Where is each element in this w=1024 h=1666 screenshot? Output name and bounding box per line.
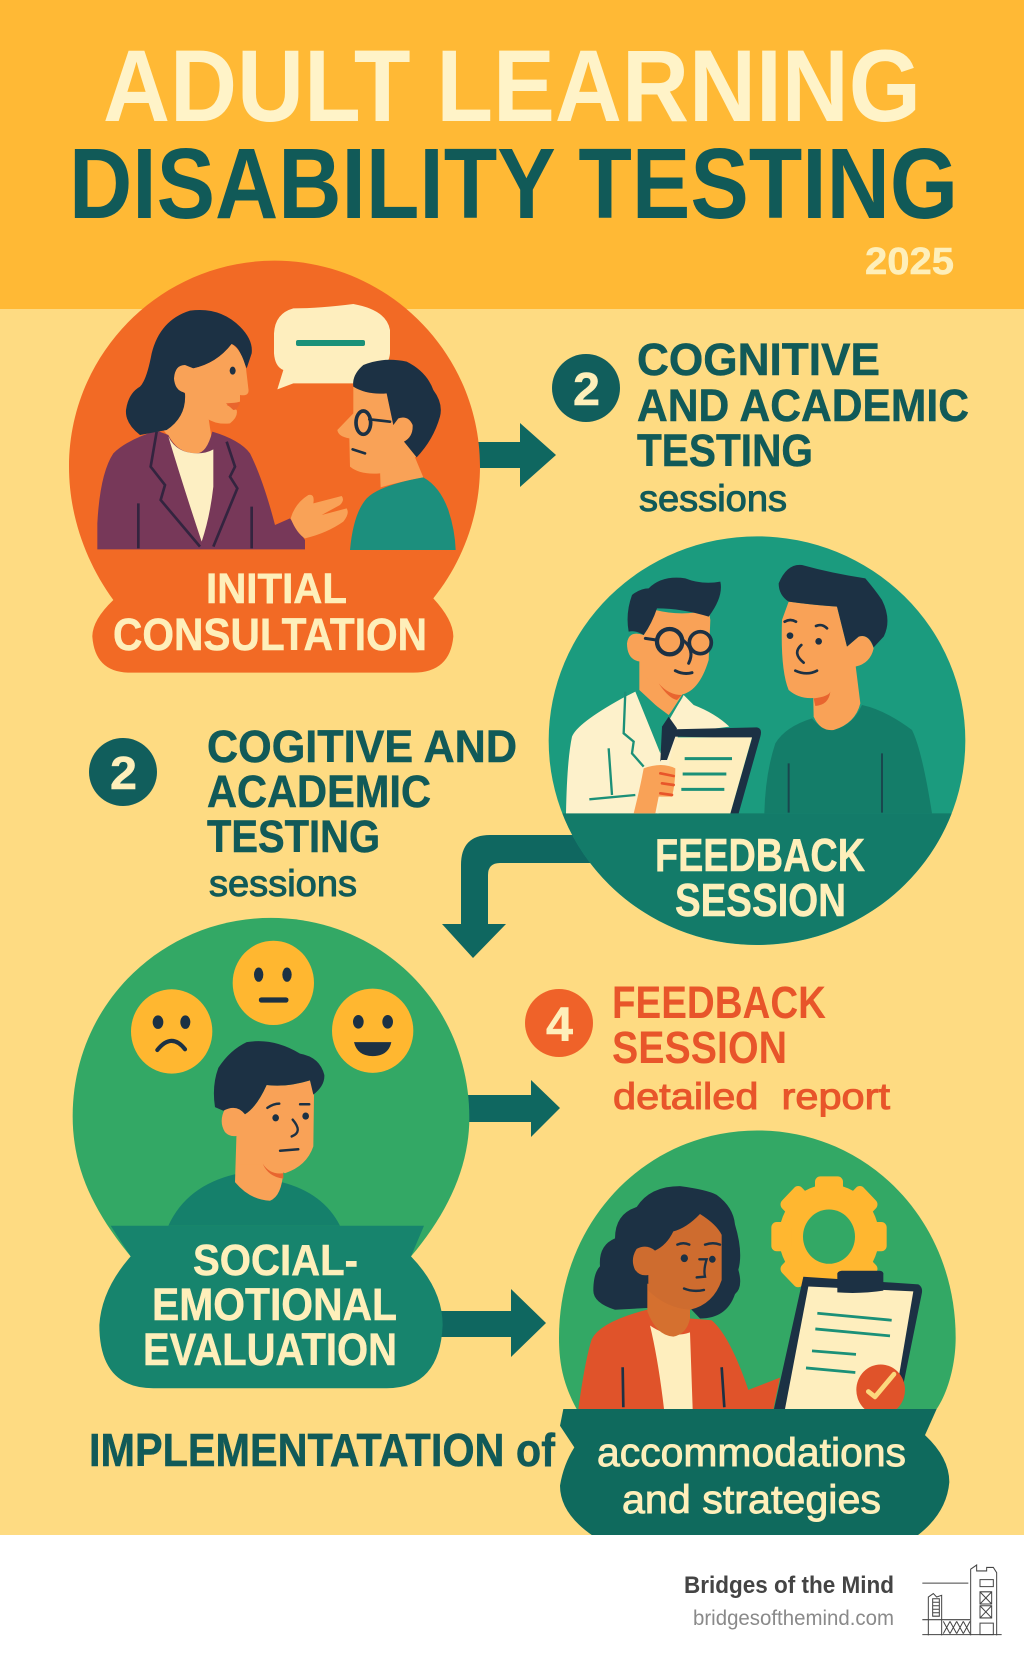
- website: bridgesofthemind.com: [693, 1607, 894, 1630]
- label: initial consultation: INITIAL: [206, 565, 347, 613]
- step 4 text: feedback session: FEEDBACK: [612, 977, 826, 1028]
- happy face: [332, 989, 413, 1073]
- step 4 text: feedback session: [525, 977, 891, 1117]
- woman: [578, 1186, 780, 1409]
- label band: [560, 1409, 949, 1536]
- clipboard with check: [774, 1271, 922, 1415]
- panel: social-emotional evaluation: [73, 918, 469, 1388]
- gear icon: [771, 1176, 887, 1297]
- step 2 text: cognitive and academic testing: [552, 334, 969, 519]
- worried person: [168, 1041, 340, 1226]
- number badge: [525, 989, 593, 1057]
- neutral face: [233, 941, 314, 1025]
- orange badge: [69, 261, 480, 673]
- number badge: [552, 354, 620, 422]
- label: feedback session: SESSION: [675, 874, 846, 926]
- patient: [764, 565, 932, 813]
- step 2 text: cognitive and academic testing: AND ACADEMIC: [637, 380, 969, 431]
- step 2 text: cognitive and academic testing: sessions: [639, 478, 787, 519]
- brand name: Bridges of the Mind: [684, 1572, 894, 1599]
- panel: feedback session: [549, 536, 965, 945]
- arrow: step 1 to step 2: [478, 423, 556, 487]
- speech bubble: [274, 304, 390, 389]
- implementation caption: IMPLEMENTATATION of: [89, 1424, 556, 1476]
- header banner: [0, 0, 1024, 309]
- green bulb: [73, 918, 469, 1256]
- step 2 text left: cogitive and academic testing: sessions: [209, 863, 357, 904]
- teal circle: [549, 536, 965, 945]
- label: social-emotional evaluation: SOCIAL-: [193, 1236, 358, 1285]
- number badge: [89, 738, 157, 806]
- step 4 text: feedback session: SESSION: [612, 1022, 787, 1073]
- label: social-emotional evaluation: EMOTIONAL: [152, 1279, 397, 1330]
- step 2 text left: cogitive and academic testing: COGITIVE AND: [207, 721, 517, 772]
- year: 2025: [865, 241, 954, 283]
- label: feedback session: FEEDBACK: [655, 829, 865, 881]
- step 2 text: cognitive and academic testing: 2: [573, 363, 600, 415]
- woman consultant: [97, 310, 348, 549]
- label: accommodations and strategies: and strategies: [622, 1478, 881, 1522]
- label band: [562, 813, 952, 945]
- doctor: [566, 578, 761, 813]
- step 2 text left: cogitive and academic testing: ACADEMIC: [207, 766, 431, 817]
- label: feedback session: [655, 829, 865, 926]
- green bulb: [559, 1130, 956, 1409]
- logo: tower bridge: [922, 1565, 1002, 1635]
- footer: [0, 1535, 1024, 1666]
- step 2 text left: cogitive and academic testing: 2: [110, 747, 137, 799]
- man client: [337, 360, 456, 550]
- label: accommodations and strategies: [597, 1431, 906, 1522]
- step 4 text: feedback session: detailed report: [613, 1076, 891, 1117]
- label: social-emotional evaluation: [143, 1236, 397, 1375]
- step 2 text left: cogitive and academic testing: TESTING: [207, 811, 380, 862]
- sad face: [131, 989, 212, 1074]
- step 2 text: cognitive and academic testing: COGNITIVE: [637, 334, 880, 385]
- label: accommodations and strategies: accommodations: [597, 1431, 906, 1475]
- step 4 text: feedback session: 4: [546, 999, 573, 1052]
- elbow arrow: feedback to social-emotional: [442, 835, 600, 958]
- title line 1: ADULT LEARNING: [103, 29, 921, 143]
- label band: [99, 1226, 443, 1388]
- panel: initial consultation: [69, 261, 480, 673]
- label: social-emotional evaluation: EVALUATION: [143, 1324, 397, 1375]
- arrow: social-emotional to step 4: [467, 1080, 560, 1137]
- step 2 text left: cogitive and academic testing: [89, 721, 517, 904]
- label: initial consultation: [113, 565, 427, 660]
- label: initial consultation: CONSULTATION: [113, 609, 427, 660]
- arrow: social-emotional to implementation: [440, 1289, 546, 1357]
- step 2 text: cognitive and academic testing: TESTING: [637, 425, 813, 476]
- panel: implementation of accommodations: [559, 1130, 956, 1536]
